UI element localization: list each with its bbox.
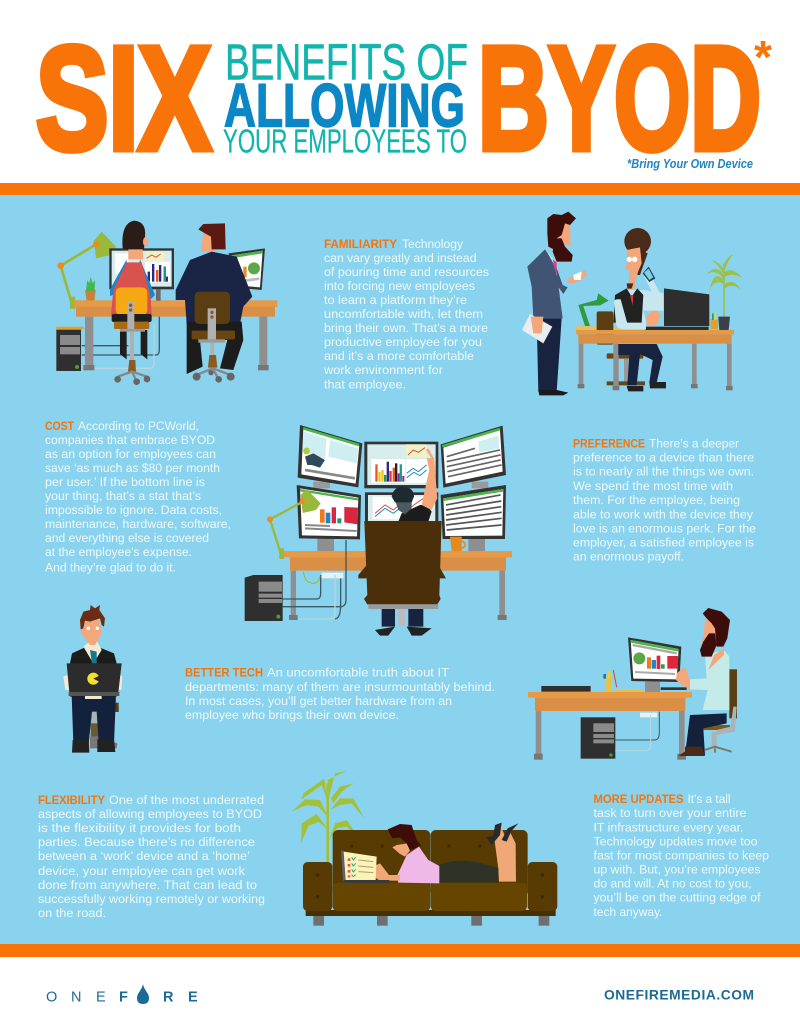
text block: better tech: BETTER TECH <box>185 666 263 680</box>
text block: familiarity <box>323 237 489 392</box>
text block: preference: preference to a device than there <box>573 450 754 464</box>
text block: better tech: employee who brings their own device. <box>185 708 399 722</box>
illustration: man with laptop <box>63 605 122 753</box>
title: SIX <box>36 17 211 181</box>
text block: cost: per user.’ If the bottom line is <box>45 475 205 489</box>
text block: flexibility: FLEXIBILITY <box>38 793 106 807</box>
text block: preference: PREFERENCE <box>573 436 645 450</box>
text block: preference: able to work with the device they <box>573 508 754 522</box>
text block: familiarity: productive employee for you <box>324 335 482 349</box>
text block: cost: at the employee’s expense. <box>45 545 192 559</box>
text block: more updates: up with. But, you’re employees <box>594 862 760 876</box>
illustration: bearded man at monitor <box>528 608 737 760</box>
text block: familiarity: of pouring time and resources <box>324 265 489 279</box>
text block: familiarity: uncomfortable with, let them <box>324 307 483 321</box>
title <box>36 17 772 181</box>
text block: cost: companies that embrace BYOD <box>45 433 215 447</box>
text block: cost: According to PCWorld, <box>78 419 199 433</box>
text block: cost: And they’re glad to do it. <box>45 560 176 574</box>
text block: preference: an enormous payoff. <box>573 550 684 564</box>
footer logo: OneFire: E <box>188 990 198 1006</box>
text block: better tech: departments: many of them are insurmountably behind. <box>185 680 495 694</box>
text block: flexibility: on the road. <box>38 906 106 920</box>
text block: flexibility: is the flexibility it provides for both <box>38 821 241 835</box>
text block: preference <box>573 436 756 564</box>
text block: familiarity: bring their own. That’s a more <box>324 321 488 335</box>
text block: flexibility: parties. Because there’s no difference <box>38 835 255 849</box>
text block: better tech: In most cases, you’ll get better hardware from an <box>185 694 452 708</box>
text block: flexibility: between a ‘work’ device and a ‘home’ <box>38 849 250 863</box>
text block: more updates: IT infrastructure every year. <box>594 820 744 834</box>
illustration: two men at desk with phone <box>522 212 743 395</box>
text block: preference: employer, a satisfied employee is <box>573 536 754 550</box>
text block: preference: There’s a deeper <box>649 436 739 450</box>
title: BENEFITS OF <box>225 34 468 90</box>
text block: cost: COST <box>45 419 74 433</box>
text block: more updates: It’s a tall <box>688 792 730 806</box>
text block: cost: maintenance, hardware, software, <box>45 517 231 531</box>
text block: cost: and everything else is covered <box>45 531 209 545</box>
text block: familiarity: work environment for <box>323 363 443 377</box>
text block: familiarity: and it’s a more comfortable <box>324 349 474 363</box>
text block: more updates: Technology updates move too <box>594 834 758 848</box>
title: * <box>754 31 772 83</box>
illustration: two employees at desk <box>56 221 277 385</box>
footer logo: OneFire: R <box>163 990 174 1006</box>
text block: cost <box>45 419 231 574</box>
text block: better tech: An uncomfortable truth about IT <box>267 666 449 680</box>
bottom orange band <box>0 944 800 957</box>
text block: preference: love is an enormous perk. For the <box>573 522 756 536</box>
text block: more updates: task to turn over your entire <box>594 806 747 820</box>
illustration: woman on couch with laptop <box>292 771 557 926</box>
text block: cost: save ‘as much as $80 per month <box>45 461 220 475</box>
text block: flexibility: device, your employee can get work <box>38 864 246 878</box>
text block: more updates: tech anyway. <box>594 905 662 919</box>
text block: flexibility: One of the most underrated <box>109 793 264 807</box>
text block: familiarity: FAMILIARITY <box>324 237 398 251</box>
text block: better tech <box>185 666 495 722</box>
footer logo: OneFire: F <box>119 990 128 1006</box>
subtitle footnote: *Bring Your Own Device <box>627 157 753 171</box>
footer logo: OneFire: ONE <box>46 990 106 1006</box>
text block: more updates <box>594 792 769 919</box>
text block: more updates: fast for most companies to keep <box>594 848 769 862</box>
text block: familiarity: into forcing new employees <box>324 279 475 293</box>
title: YOUR EMPLOYEES TO <box>223 122 467 160</box>
text block: preference: them. For the employee, being <box>573 493 740 507</box>
text block: cost: your thing, that’s a stat that’s <box>45 489 201 503</box>
footer website: ONEFIREMEDIA.COM <box>604 988 754 1002</box>
footer logo: OneFire <box>46 984 198 1006</box>
text block: familiarity: can vary greatly and instead <box>324 251 477 265</box>
text block: cost: as an option for employees can <box>45 447 216 461</box>
illustration: trader at six monitors <box>245 425 512 636</box>
text block: cost: impossible to ignore. Data costs, <box>45 503 222 517</box>
text block: preference: is to nearly all the things we own. <box>573 464 754 478</box>
text block: flexibility: done from anywhere. That can lead to <box>38 878 257 892</box>
text block: more updates: do and will. At no cost to you, <box>594 876 752 890</box>
title: ALLOWING <box>224 72 465 140</box>
text block: familiarity: that employee. <box>324 378 406 392</box>
text block: preference: We spend the most time with <box>573 479 733 493</box>
text block: flexibility: aspects of allowing employees to BYOD <box>38 807 262 821</box>
main blue panel <box>0 195 800 945</box>
text block: familiarity: Technology <box>402 237 464 251</box>
text block: more updates: you’ll be on the cutting edge of <box>594 890 761 904</box>
text block: familiarity: to learn a platform they’re <box>324 293 467 307</box>
top orange band <box>0 183 800 195</box>
text block: flexibility: successfully working remotely or working <box>38 892 265 906</box>
text block: flexibility <box>38 793 265 920</box>
text block: more updates: MORE UPDATES <box>594 792 684 806</box>
